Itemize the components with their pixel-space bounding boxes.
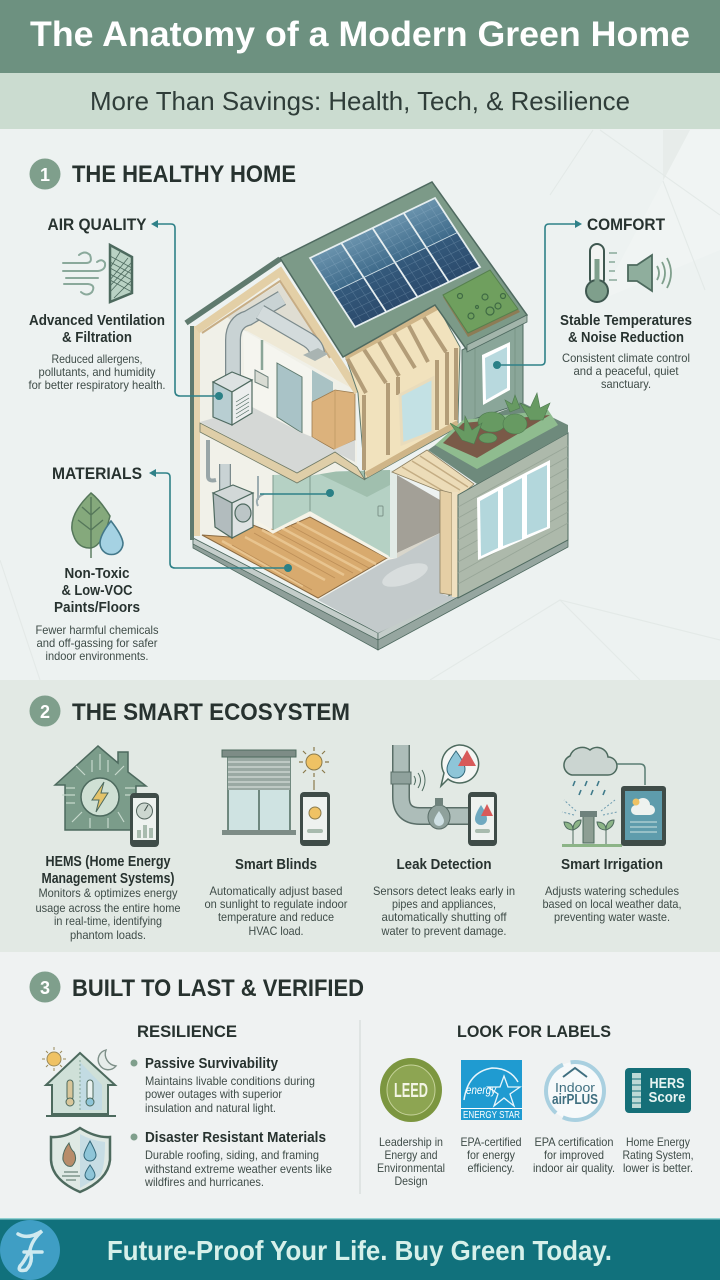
panel: smart ecosystem <box>0 680 720 952</box>
icon: HERS Score badge: HERS <box>650 1075 684 1092</box>
comfort body: and a peaceful, quiet <box>574 365 679 378</box>
house: lower rooms <box>200 430 453 633</box>
panel: air quality <box>28 215 166 392</box>
look for labels heading: LOOK FOR LABELS <box>457 1022 611 1041</box>
passive survivability text: power outages with superior <box>145 1088 282 1101</box>
air quality subhead: Advanced Ventilation <box>29 313 165 329</box>
HEMS body: Monitors & optimizes energy <box>38 887 178 900</box>
air quality heading: AIR QUALITY <box>48 215 147 234</box>
LEED caption: Design <box>394 1175 428 1188</box>
passive survivability text <box>130 1056 315 1115</box>
air quality body <box>28 353 166 392</box>
house: left wall frame <box>190 326 194 540</box>
section 1 heading: THE HEALTHY HOME <box>72 161 296 188</box>
Indoor airPLUS caption: EPA certification <box>534 1136 614 1149</box>
smart irrigation body <box>542 885 682 924</box>
leak detection body: pipes and appliances, <box>392 898 496 911</box>
icon: passive survivability house <box>42 1047 116 1116</box>
LEED caption: Leadership in <box>379 1136 443 1149</box>
air quality body: for better respiratory health. <box>28 379 166 392</box>
arrow: air quality connector <box>151 220 219 396</box>
materials body: Fewer harmful chemicals <box>36 624 159 637</box>
air quality subhead: & Filtration <box>62 330 132 346</box>
comfort body: Consistent climate control <box>562 352 690 365</box>
disaster resistant text: Disaster Resistant Materials <box>145 1130 326 1146</box>
house: upper side wall <box>462 320 523 423</box>
leak detection body: Sensors detect leaks early in <box>373 885 515 898</box>
leak detection body <box>373 885 515 938</box>
disaster resistant text <box>130 1130 332 1189</box>
materials body: and off-gassing for safer <box>36 637 158 650</box>
panel: materials <box>36 464 159 663</box>
materials heading: MATERIALS <box>52 464 142 483</box>
Indoor airPLUS caption: indoor air quality. <box>533 1162 615 1175</box>
house: main roof <box>280 182 527 357</box>
footer banner <box>0 1218 720 1280</box>
icon: Indoor airPLUS badge: airPLUS <box>552 1091 598 1108</box>
icon: LEED badge <box>380 1058 442 1122</box>
disaster resistant text: withstand extreme weather events like <box>144 1163 332 1176</box>
smart irrigation body: Adjusts watering schedules <box>545 885 679 898</box>
icon: smart irrigation <box>562 747 666 847</box>
smart blinds body: HVAC load. <box>248 925 304 938</box>
section 2 heading: 2 <box>40 702 50 722</box>
leak detection body: automatically shutting off <box>382 911 507 924</box>
icon: Energy Star badge: energy <box>466 1083 497 1097</box>
house: front window <box>400 378 433 444</box>
section 1 heading: 1 <box>40 165 50 185</box>
header: title bar <box>0 0 720 73</box>
house: beam over garage <box>392 450 474 496</box>
HERS caption: Rating System, <box>622 1149 694 1162</box>
house: upper room interior <box>200 274 365 483</box>
passive survivability text: Passive Survivability <box>145 1056 278 1072</box>
LEED caption: Environmental <box>377 1162 445 1175</box>
HEMS body: in real-time, identifying <box>54 915 162 928</box>
smart irrigation body: preventing water waste. <box>554 911 670 924</box>
panel: comfort <box>560 215 692 391</box>
house: callout dots <box>215 361 501 572</box>
HERS caption: lower is better. <box>623 1162 693 1175</box>
icon: footer logo <box>0 1220 60 1280</box>
comfort subhead: & Noise Reduction <box>568 330 684 346</box>
LEED caption <box>377 1136 445 1188</box>
Energy Star caption: for energy <box>467 1149 515 1162</box>
materials body <box>36 624 159 663</box>
comfort subhead: Stable Temperatures <box>560 313 692 329</box>
section 1 heading <box>30 158 296 190</box>
Indoor airPLUS caption <box>533 1136 615 1175</box>
panel: built to last and verified <box>0 952 720 1219</box>
HEMS body: phantom loads. <box>70 929 146 942</box>
LEED caption: Energy and <box>384 1149 438 1162</box>
HERS caption <box>622 1136 694 1175</box>
passive survivability text: Maintains livable conditions during <box>145 1075 315 1088</box>
icon: HERS Score badge: Score <box>648 1089 686 1106</box>
leak detection heading: Leak Detection <box>396 857 492 873</box>
passive survivability text: insulation and natural light. <box>145 1102 276 1115</box>
title: The Anatomy of a Modern Green Home <box>30 15 690 54</box>
house: roof planter garden <box>428 393 568 484</box>
icon: thermometer and speaker <box>586 244 671 302</box>
Indoor airPLUS caption: for improved <box>544 1149 604 1162</box>
resilience heading: RESILIENCE <box>137 1022 237 1041</box>
house: front stud wall <box>345 305 460 479</box>
air quality body: pollutants, and humidity <box>38 366 156 379</box>
icon: HEMS house and phone <box>55 746 159 847</box>
comfort body <box>562 352 690 391</box>
house: washer unit <box>213 485 253 538</box>
materials subhead: Non-Toxic <box>64 566 130 582</box>
materials subhead: & Low-VOC <box>62 583 133 599</box>
house: solar panel array <box>310 198 480 327</box>
icon: wind and filter <box>63 245 132 302</box>
icon: LEED badge: LEED <box>394 1080 428 1102</box>
icon: disaster resistant shield <box>51 1128 110 1192</box>
icon: smart blinds <box>222 747 330 846</box>
HEMS heading <box>42 854 175 887</box>
house: wall stud <box>194 326 200 536</box>
arrow: comfort connector <box>497 220 582 365</box>
HEMS body: usage across the entire home <box>36 902 180 915</box>
Energy Star caption: efficiency. <box>468 1162 514 1175</box>
icon: Indoor airPLUS badge <box>546 1062 604 1120</box>
comfort subhead <box>560 313 692 346</box>
comfort body: sanctuary. <box>601 378 651 391</box>
HEMS heading: HEMS (Home Energy <box>46 854 170 870</box>
Energy Star caption: EPA-certified <box>460 1136 522 1149</box>
house: interior callout line <box>260 493 330 495</box>
icon: leaf and drop <box>72 493 123 558</box>
Energy Star caption <box>460 1136 522 1175</box>
HEMS heading: Management Systems) <box>42 871 175 887</box>
HEMS body <box>36 887 180 942</box>
house: lower side wall with siding <box>458 433 568 598</box>
house: ventilation ducts <box>208 298 328 506</box>
house cutaway illustration <box>186 182 568 650</box>
HERS caption: Home Energy <box>626 1136 690 1149</box>
smart irrigation body: based on local weather data, <box>542 898 682 911</box>
air quality body: Reduced allergens, <box>52 353 142 366</box>
smart blinds body: Automatically adjust based <box>210 885 342 898</box>
section 3 heading: 3 <box>40 978 50 998</box>
section 3 heading: BUILT TO LAST & VERIFIED <box>72 975 364 1002</box>
section 2 heading: THE SMART ECOSYSTEM <box>72 699 350 726</box>
house: garage post <box>440 490 458 597</box>
materials subhead: Paints/Floors <box>54 600 140 616</box>
leak detection body: water to prevent damage. <box>381 925 506 938</box>
smart blinds body <box>204 885 348 938</box>
comfort heading: COMFORT <box>587 215 666 234</box>
air quality subhead <box>29 313 165 346</box>
smart blinds body: temperature and reduce <box>218 911 334 924</box>
house: gable frame <box>197 272 358 392</box>
house: foundation slab <box>193 533 568 650</box>
house: furnace unit <box>213 372 252 425</box>
house: green roof patch <box>443 270 520 337</box>
materials subhead <box>54 566 140 616</box>
smart blinds body: on sunlight to regulate indoor <box>204 898 348 911</box>
icon: HERS Score badge <box>625 1068 691 1113</box>
smart irrigation heading: Smart Irrigation <box>561 857 663 873</box>
icon: Energy Star badge <box>461 1060 522 1121</box>
icon: leak detection <box>391 745 497 846</box>
house: eave <box>186 259 280 323</box>
subtitle bar: More Than Savings: Health, Tech, & Resilience <box>90 86 630 116</box>
materials body: indoor environments. <box>46 650 148 663</box>
call to action: Future-Proof Your Life. Buy Green Today. <box>107 1235 612 1266</box>
disaster resistant text: Durable roofing, siding, and framing <box>145 1149 319 1162</box>
icon: Energy Star badge: ENERGY STAR <box>463 1110 520 1121</box>
arrow: materials connector <box>149 469 288 568</box>
smart blinds heading: Smart Blinds <box>235 857 317 873</box>
icon: Indoor airPLUS badge: Indoor <box>555 1080 596 1095</box>
disaster resistant text: wildfires and hurricanes. <box>144 1176 264 1189</box>
subtitle bar <box>0 73 720 129</box>
house: side window <box>482 342 510 405</box>
